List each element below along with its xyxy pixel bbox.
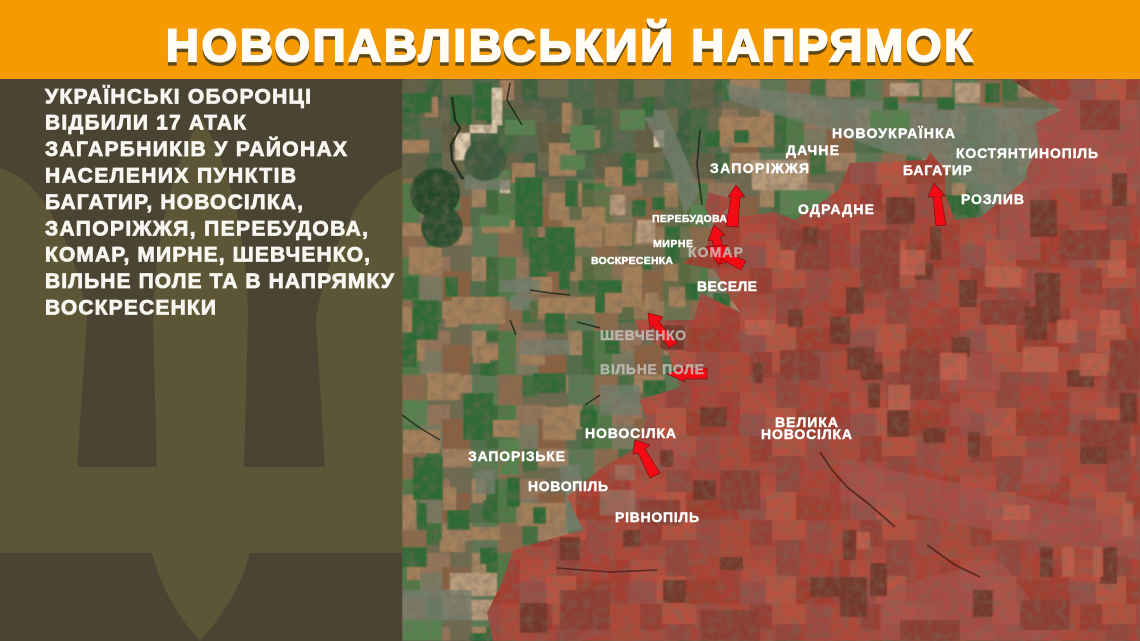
labels: settlement names: НОВОПІЛЬ (528, 478, 608, 494)
labels: settlement names: ВЕСЕЛЕ (697, 278, 757, 294)
labels: settlement names: ЗАПОРІЗЬКЕ (468, 448, 565, 464)
labels: settlement names: РІВНОПІЛЬ (615, 509, 699, 525)
labels: settlement names: НОВОСІЛКА (761, 426, 852, 442)
map: red occupied territory (487, 79, 1140, 641)
header: orange title bar (0, 0, 1140, 79)
labels: settlement names: ВОСКРЕСЕНКА (591, 255, 673, 267)
labels: muted settlement names: КОМАР (688, 244, 743, 260)
arrows: red attack directions (633, 183, 946, 478)
labels: settlement names: БАГАТИР (903, 162, 972, 178)
text block: summary of attacks: УКРАЇНСЬКІ ОБОРОНЦІ (45, 86, 311, 108)
title shadow: НОВОПАВЛІВСЬКИЙ НАПРЯМОК (166, 22, 972, 74)
text block: summary of attacks (45, 86, 395, 320)
labels: settlement names: ОДРАДНЕ (798, 201, 874, 217)
labels: settlement names: МИРНЕ (653, 238, 693, 250)
labels: settlement names: ПЕРЕБУДОВА (652, 213, 727, 225)
map: rivers and creeks (402, 83, 980, 577)
labels: settlement names (468, 125, 1098, 525)
panel: left text panel (0, 79, 402, 641)
text block: summary of attacks: КОМАР, МИРНЕ, ШЕВЧЕНКО, (45, 244, 370, 266)
labels: settlement names: НОВОСІЛКА (585, 425, 676, 441)
labels: settlement names: ДАЧНЕ (786, 142, 839, 158)
labels: settlement names: НОВОУКРАЇНКА (832, 125, 955, 141)
labels: settlement names: ВЕЛИКА (775, 414, 838, 430)
labels: settlement names: КОСТЯНТИНОПІЛЬ (956, 145, 1098, 161)
text block: summary of attacks: БАГАТИР, НОВОСІЛКА, (45, 191, 303, 214)
labels: settlement names: ЗАПОРІЖЖЯ (710, 160, 809, 176)
title: НОВОПАВЛІВСЬКИЙ НАПРЯМОК (166, 19, 972, 71)
map: surface texture (402, 79, 1140, 641)
icon: trident emblem (0, 118, 402, 641)
text block: summary of attacks: ЗАГАРБНИКІВ У РАЙОНАХ (45, 137, 347, 161)
text block: summary of attacks: ВІДБИЛИ 17 АТАК (45, 112, 246, 134)
text block: summary of attacks: НАСЕЛЕНИХ ПУНКТІВ (45, 164, 296, 188)
map: farmland fields under Ukrainian control (400, 79, 1140, 641)
labels: muted settlement names: ВІЛЬНЕ ПОЛЕ (600, 361, 704, 377)
labels: muted settlement names (600, 244, 743, 377)
text block: summary of attacks: ЗАПОРІЖЖЯ, ПЕРЕБУДОВА, (45, 218, 368, 240)
labels: muted settlement names: ШЕВЧЕНКО (600, 327, 686, 343)
map: satellite map with frontline (400, 79, 1140, 641)
text block: summary of attacks: ВІЛЬНЕ ПОЛЕ ТА В НАПРЯМКУ (45, 270, 395, 293)
labels: settlement names: РОЗЛИВ (961, 191, 1024, 207)
text block: summary of attacks: ВОСКРЕСЕНКИ (45, 296, 216, 320)
